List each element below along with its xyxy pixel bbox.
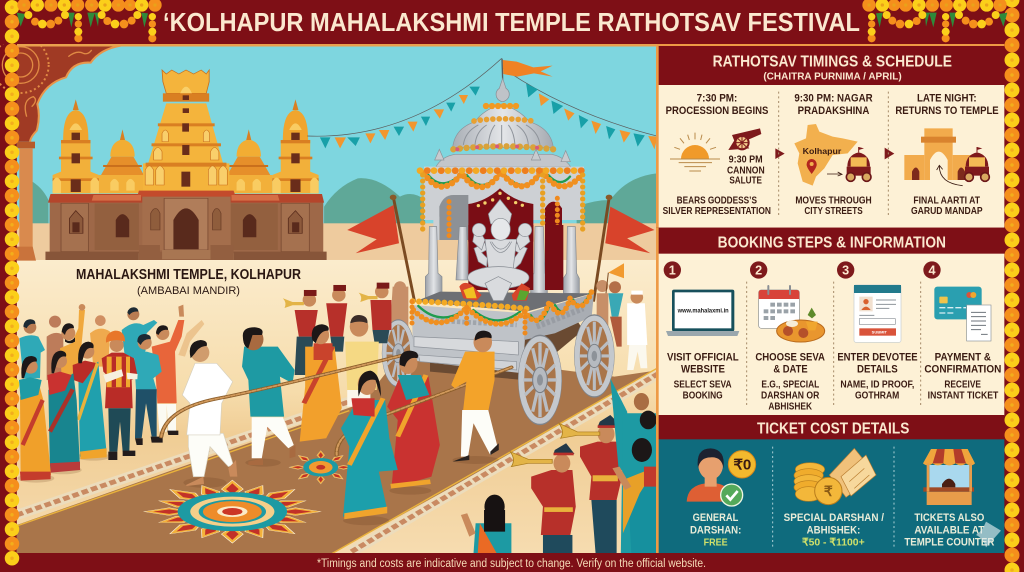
column: late night: RETURNS TO TEMPLE xyxy=(895,105,999,117)
ticket text: general: GENERAL xyxy=(693,512,739,524)
watermark xyxy=(976,522,1001,547)
arch: decorative spandrel and pillar xyxy=(0,37,121,261)
goddess xyxy=(468,199,532,301)
flag: left red xyxy=(347,195,415,302)
devotee: back teal man xyxy=(122,307,157,358)
step text: website xyxy=(667,351,739,401)
woman: teal sari red sash xyxy=(45,351,82,474)
column: late night: FINAL AARTI AT xyxy=(913,195,980,206)
women: right edge crowd xyxy=(610,378,660,553)
chariot niche lower xyxy=(468,225,533,290)
chariot front garlands xyxy=(412,292,592,335)
rope xyxy=(161,355,404,437)
panel: booking steps xyxy=(656,228,1004,416)
dividers xyxy=(779,92,888,217)
devotee: teal background man xyxy=(19,319,45,378)
chariot pillars xyxy=(425,227,579,302)
chariot finial xyxy=(496,78,509,102)
chariot dome xyxy=(453,104,553,147)
caption: temple name: (AMBABAI MANDIR) xyxy=(137,285,240,297)
column: 7:30 PM procession: BEARS GODDESS’S xyxy=(677,195,757,206)
chariot openings xyxy=(439,195,468,240)
icon: laptop xyxy=(666,290,739,336)
caption: temple name: MAHALAKSHMI TEMPLE, KOLHAPUR xyxy=(76,267,301,283)
ticket text: special xyxy=(784,512,884,549)
flag: right red xyxy=(593,195,654,302)
rope second section xyxy=(337,367,511,455)
title: ‘KOLHAPUR MAHALAKSHMI TEMPLE RATHOTSAV FESTIVAL xyxy=(163,7,860,37)
rangoli large xyxy=(144,480,321,543)
icon: person free xyxy=(687,448,756,506)
cream ground xyxy=(17,260,657,553)
step text: payment: CONFIRMATION xyxy=(924,364,1001,376)
heading: ticket cost: TICKET COST DETAILS xyxy=(757,420,909,437)
procession road xyxy=(17,350,660,553)
step text: devotee: DETAILS xyxy=(857,364,898,376)
ticket text: general: DARSHAN: xyxy=(690,525,741,537)
garland: top right xyxy=(862,0,1007,42)
people and rangoli xyxy=(144,283,660,553)
ticket text: special: ABHISHEK: xyxy=(807,525,860,537)
offering flowers xyxy=(459,283,482,301)
heading: timings: RATHOTSAV TIMINGS & SCHEDULE xyxy=(713,54,952,71)
column: 9:30 PM nagar pradakshina: 9:30 PM: NAGAR xyxy=(794,92,873,104)
central gopuram xyxy=(143,70,229,197)
column: 7:30 PM procession: CANNON xyxy=(727,165,765,176)
ticket text: counter: AVAILABLE AT xyxy=(914,525,985,537)
ticket text: counter xyxy=(904,512,995,549)
man: saffron kurta pulling rope xyxy=(451,331,499,464)
step text: seva xyxy=(755,351,825,412)
step text: devotee xyxy=(837,351,918,401)
heading: timings: (CHAITRA PURNIMA / APRIL) xyxy=(763,71,902,82)
divider arrow xyxy=(885,148,894,159)
illustration: festival scene xyxy=(17,45,660,553)
woman: orange sari xyxy=(18,356,54,483)
step badges xyxy=(664,261,941,279)
column: 7:30 PM procession xyxy=(663,92,771,217)
devotee: teal shirt man xyxy=(134,334,163,445)
band: rear musicians xyxy=(283,283,391,375)
icon: coins and tickets: ₹ xyxy=(824,483,833,499)
ticket text: counter: TEMPLE COUNTER xyxy=(904,537,995,549)
ticket text: special: ₹50 - ₹1100+ xyxy=(802,538,865,549)
devotee: woman from behind xyxy=(461,495,511,553)
bunting left xyxy=(307,58,502,148)
step text: website: VISIT OFFICIAL xyxy=(667,351,739,363)
step badges: 4 xyxy=(928,264,936,278)
band: rear trumpeter xyxy=(559,415,622,553)
temple: Mahalakshmi xyxy=(45,70,327,260)
sky xyxy=(17,45,657,232)
road right border xyxy=(333,367,660,553)
icon: chariot at gate xyxy=(965,147,989,181)
bunting right xyxy=(503,68,657,149)
footer note: *Timings and costs are indicative and subject to change. Verify on the official website. xyxy=(317,558,706,570)
step badges: 1 xyxy=(669,264,676,278)
icon: sunset xyxy=(670,133,720,171)
icon: ticket counter xyxy=(923,449,975,505)
chariot dome garlands xyxy=(453,106,553,149)
temple walls xyxy=(50,202,323,253)
dividers xyxy=(747,282,921,407)
icon: calendar and thali xyxy=(759,286,825,342)
garland: right column xyxy=(1004,0,1020,572)
column: late night: LATE NIGHT: xyxy=(917,92,977,104)
chariot frieze xyxy=(424,167,584,220)
step text: seva: DARSHAN OR xyxy=(761,390,819,401)
icon: form xyxy=(854,285,901,342)
chariot lamps xyxy=(477,192,524,207)
icon: person free: ₹0 xyxy=(733,457,751,473)
step text: website: BOOKING xyxy=(683,390,723,401)
woman: teal sari pulling rope xyxy=(341,371,398,525)
background crowd right xyxy=(390,263,624,347)
column: 7:30 PM procession: 9:30 PM xyxy=(729,154,763,165)
man: white attendant xyxy=(627,291,647,370)
title band xyxy=(0,0,1024,46)
chariot: canopy xyxy=(420,59,584,242)
devotee: bearded yellow xyxy=(60,304,85,377)
sand band xyxy=(17,223,657,262)
icon: laptop: www.mahalaxmi.in xyxy=(677,308,729,314)
icon: temple gate xyxy=(904,128,971,186)
devotee: orange kurta xyxy=(152,305,184,435)
chariot rear wheel left xyxy=(382,319,415,387)
ticket text: general: FREE xyxy=(704,538,728,549)
woman: teal sari gold border xyxy=(73,342,110,461)
step text: payment: RECEIVE xyxy=(944,380,981,391)
step text: payment xyxy=(924,351,1001,401)
heading: booking: BOOKING STEPS & INFORMATION xyxy=(718,235,946,252)
ticket text: counter: TICKETS ALSO xyxy=(914,512,984,524)
step text: devotee: GOTHRAM xyxy=(855,390,899,401)
step text: seva: & DATE xyxy=(773,364,808,376)
chariot deck front xyxy=(412,305,527,373)
step text: seva: ABHISHEK xyxy=(768,401,812,412)
woman: orange sari centre xyxy=(300,324,342,442)
silhouette: raised arm xyxy=(178,320,204,357)
icon: Kolhapur map xyxy=(794,124,858,186)
devotee: turban and vest xyxy=(102,331,138,460)
panel: timings and schedule xyxy=(656,43,1004,228)
background trees xyxy=(29,173,657,227)
road left border xyxy=(17,402,349,526)
crowd: left devotees xyxy=(18,304,237,488)
step text: website: WEBSITE xyxy=(681,364,725,376)
step badges: 3 xyxy=(842,264,849,278)
column: 7:30 PM procession: PROCESSION BEGINS xyxy=(666,105,768,117)
step text: seva: CHOOSE SEVA xyxy=(755,351,825,363)
footer bar xyxy=(0,553,1024,572)
column: 9:30 PM nagar pradakshina: CITY STREETS xyxy=(804,206,863,217)
step badges: 2 xyxy=(755,264,762,278)
step text: seva: E.G., SPECIAL xyxy=(761,380,819,391)
chariot flag xyxy=(503,60,553,77)
panel: ticket cost xyxy=(656,415,1004,553)
step text: payment: INSTANT TICKET xyxy=(928,390,998,401)
icon: form: SUBMIT xyxy=(872,330,888,335)
dividers xyxy=(773,447,894,547)
garland: top left xyxy=(17,0,162,42)
icon: cannon xyxy=(728,128,761,150)
silhouette: orange devotee xyxy=(90,315,110,367)
rangoli small xyxy=(289,450,353,484)
man: white kurta xyxy=(182,340,237,488)
garland: left column xyxy=(5,7,19,570)
caption: temple name xyxy=(76,267,301,297)
column: 7:30 PM procession: 7:30 PM: xyxy=(697,92,737,104)
chariot: deck and goddess xyxy=(382,199,615,425)
icon: small chariot xyxy=(846,147,871,181)
icon: card and receipt xyxy=(934,287,991,341)
step text: devotee: ENTER DEVOTEE xyxy=(837,351,918,363)
column: 7:30 PM procession: SALUTE xyxy=(729,176,762,187)
band: front trumpeter xyxy=(510,443,576,553)
silhouette: brown devotee xyxy=(47,316,63,380)
chariot underside xyxy=(430,310,583,380)
chariot top garlands xyxy=(420,170,583,240)
chariot roof xyxy=(436,154,571,167)
column: 9:30 PM nagar pradakshina: PRADAKSHINA xyxy=(798,105,869,117)
step text: payment: PAYMENT & xyxy=(935,351,991,363)
step text: website: SELECT SEVA xyxy=(674,380,732,391)
column: 9:30 PM nagar pradakshina: MOVES THROUGH xyxy=(795,195,872,206)
chariot wheels xyxy=(574,314,615,398)
ticket text: special: SPECIAL DARSHAN / xyxy=(784,512,884,524)
woman: red sari pulling rope xyxy=(387,351,440,495)
man: yellow kurta xyxy=(345,315,379,407)
column: late night xyxy=(895,92,999,217)
chariot red niche xyxy=(468,188,533,242)
ticket text: general xyxy=(690,512,741,549)
step text: devotee: NAME, ID PROOF, xyxy=(840,380,915,391)
icon: coins and tickets xyxy=(794,448,876,505)
man: teal kurta pulling rope xyxy=(242,327,295,467)
chariot deck top xyxy=(415,292,593,312)
column: 9:30 PM nagar pradakshina xyxy=(794,92,873,217)
heading: timings xyxy=(713,54,952,82)
column: 7:30 PM procession: SILVER REPRESENTATION xyxy=(663,206,771,217)
icon: Kolhapur map: Kolhapur xyxy=(803,146,842,156)
column: late night: GARUD MANDAP xyxy=(911,206,983,217)
divider arrow xyxy=(775,148,785,159)
